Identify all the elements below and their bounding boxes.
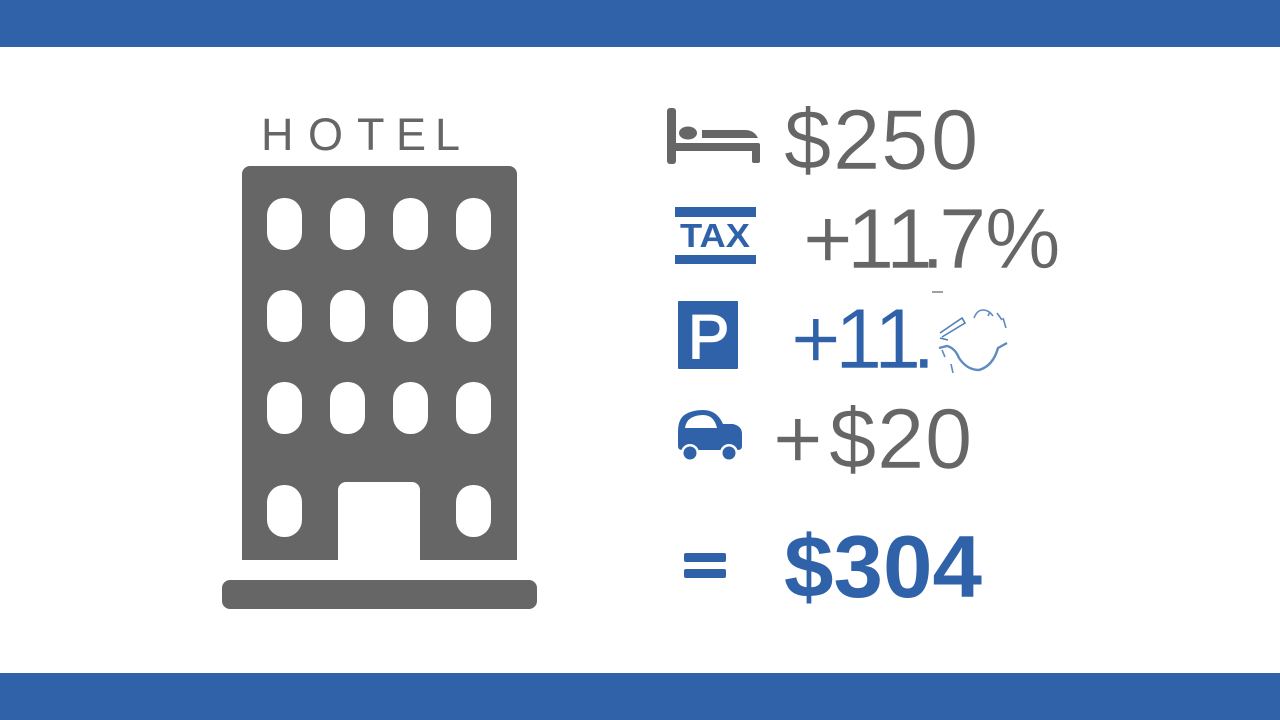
equals sign [684,553,726,578]
icon: parking: P [688,303,729,372]
icon: tax: TAX [680,217,750,254]
icon: bed [667,108,760,164]
parking fee, partly legible [791,292,1007,387]
tax rate: +11.7% [803,192,1061,287]
transport cost: +$20 [773,392,972,487]
icon: hotel building [222,166,537,609]
icon: parking [678,301,738,372]
bottom band [0,673,1280,720]
smudged glyph [932,292,1007,373]
icon: tax [675,207,756,264]
top band [0,0,1280,47]
parking fee, partly legible: +11. [791,292,936,387]
icon: car [678,410,742,462]
heading: hotel: HOTEL [261,109,460,160]
total price: $304 [784,517,982,616]
room price: $250 [784,93,978,188]
